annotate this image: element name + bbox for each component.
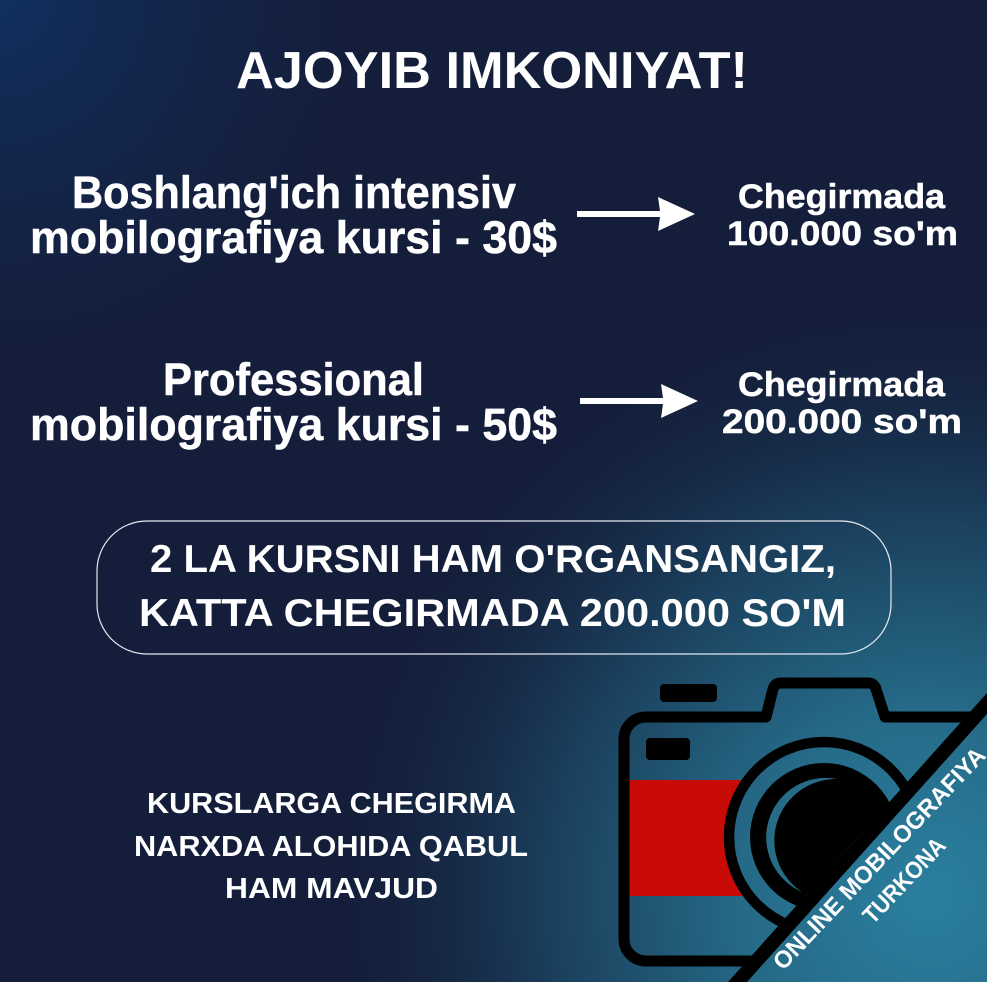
callout: bundle offer bbox=[97, 521, 891, 654]
banner text: ONLINE MOBILOGRAFIYA bbox=[768, 742, 987, 975]
note: separate enrolment bbox=[134, 788, 528, 905]
title: AJOYIB IMKONIYAT! bbox=[236, 42, 748, 100]
note: separate enrolment: HAM MAVJUD bbox=[225, 873, 438, 905]
icon: camera bbox=[624, 683, 987, 961]
note: separate enrolment: KURSLARGA CHEGIRMA bbox=[147, 788, 516, 820]
course 1 name and price: mobilografiya kursi - 30$ bbox=[30, 212, 557, 263]
camera body outline bbox=[624, 683, 987, 961]
callout: bundle offer: 2 LA KURSNI HAM O'RGANSANGIZ, bbox=[150, 538, 836, 581]
course 1 name and price bbox=[30, 167, 557, 263]
banner text: TURKONA bbox=[858, 832, 952, 929]
course 2 name and price bbox=[30, 354, 557, 450]
course 2 name and price: mobilografiya kursi - 50$ bbox=[30, 399, 557, 450]
arrow 2 bbox=[580, 384, 698, 418]
note: separate enrolment: NARXDA ALOHIDA QABUL bbox=[134, 831, 528, 863]
course 2 discount: 200.000 so'm bbox=[722, 403, 962, 441]
arrow 1 bbox=[577, 197, 695, 231]
course 1 discount: Chegirmada bbox=[738, 178, 946, 216]
course 1 discount bbox=[727, 178, 958, 253]
diagonal banner band bbox=[728, 693, 987, 982]
course 2 discount bbox=[722, 366, 962, 441]
course 1 name and price: Boshlang'ich intensiv bbox=[72, 167, 516, 218]
course 1 discount: 100.000 so'm bbox=[727, 215, 958, 253]
camera lens bbox=[729, 742, 919, 932]
course 2 name and price: Professional bbox=[163, 354, 424, 405]
callout: bundle offer: KATTA CHEGIRMADA 200.000 SO'M bbox=[139, 592, 846, 635]
camera red stripe bbox=[629, 780, 743, 896]
camera flash button bbox=[660, 684, 717, 702]
camera viewfinder bbox=[646, 738, 690, 760]
course 2 discount: Chegirmada bbox=[738, 366, 946, 404]
